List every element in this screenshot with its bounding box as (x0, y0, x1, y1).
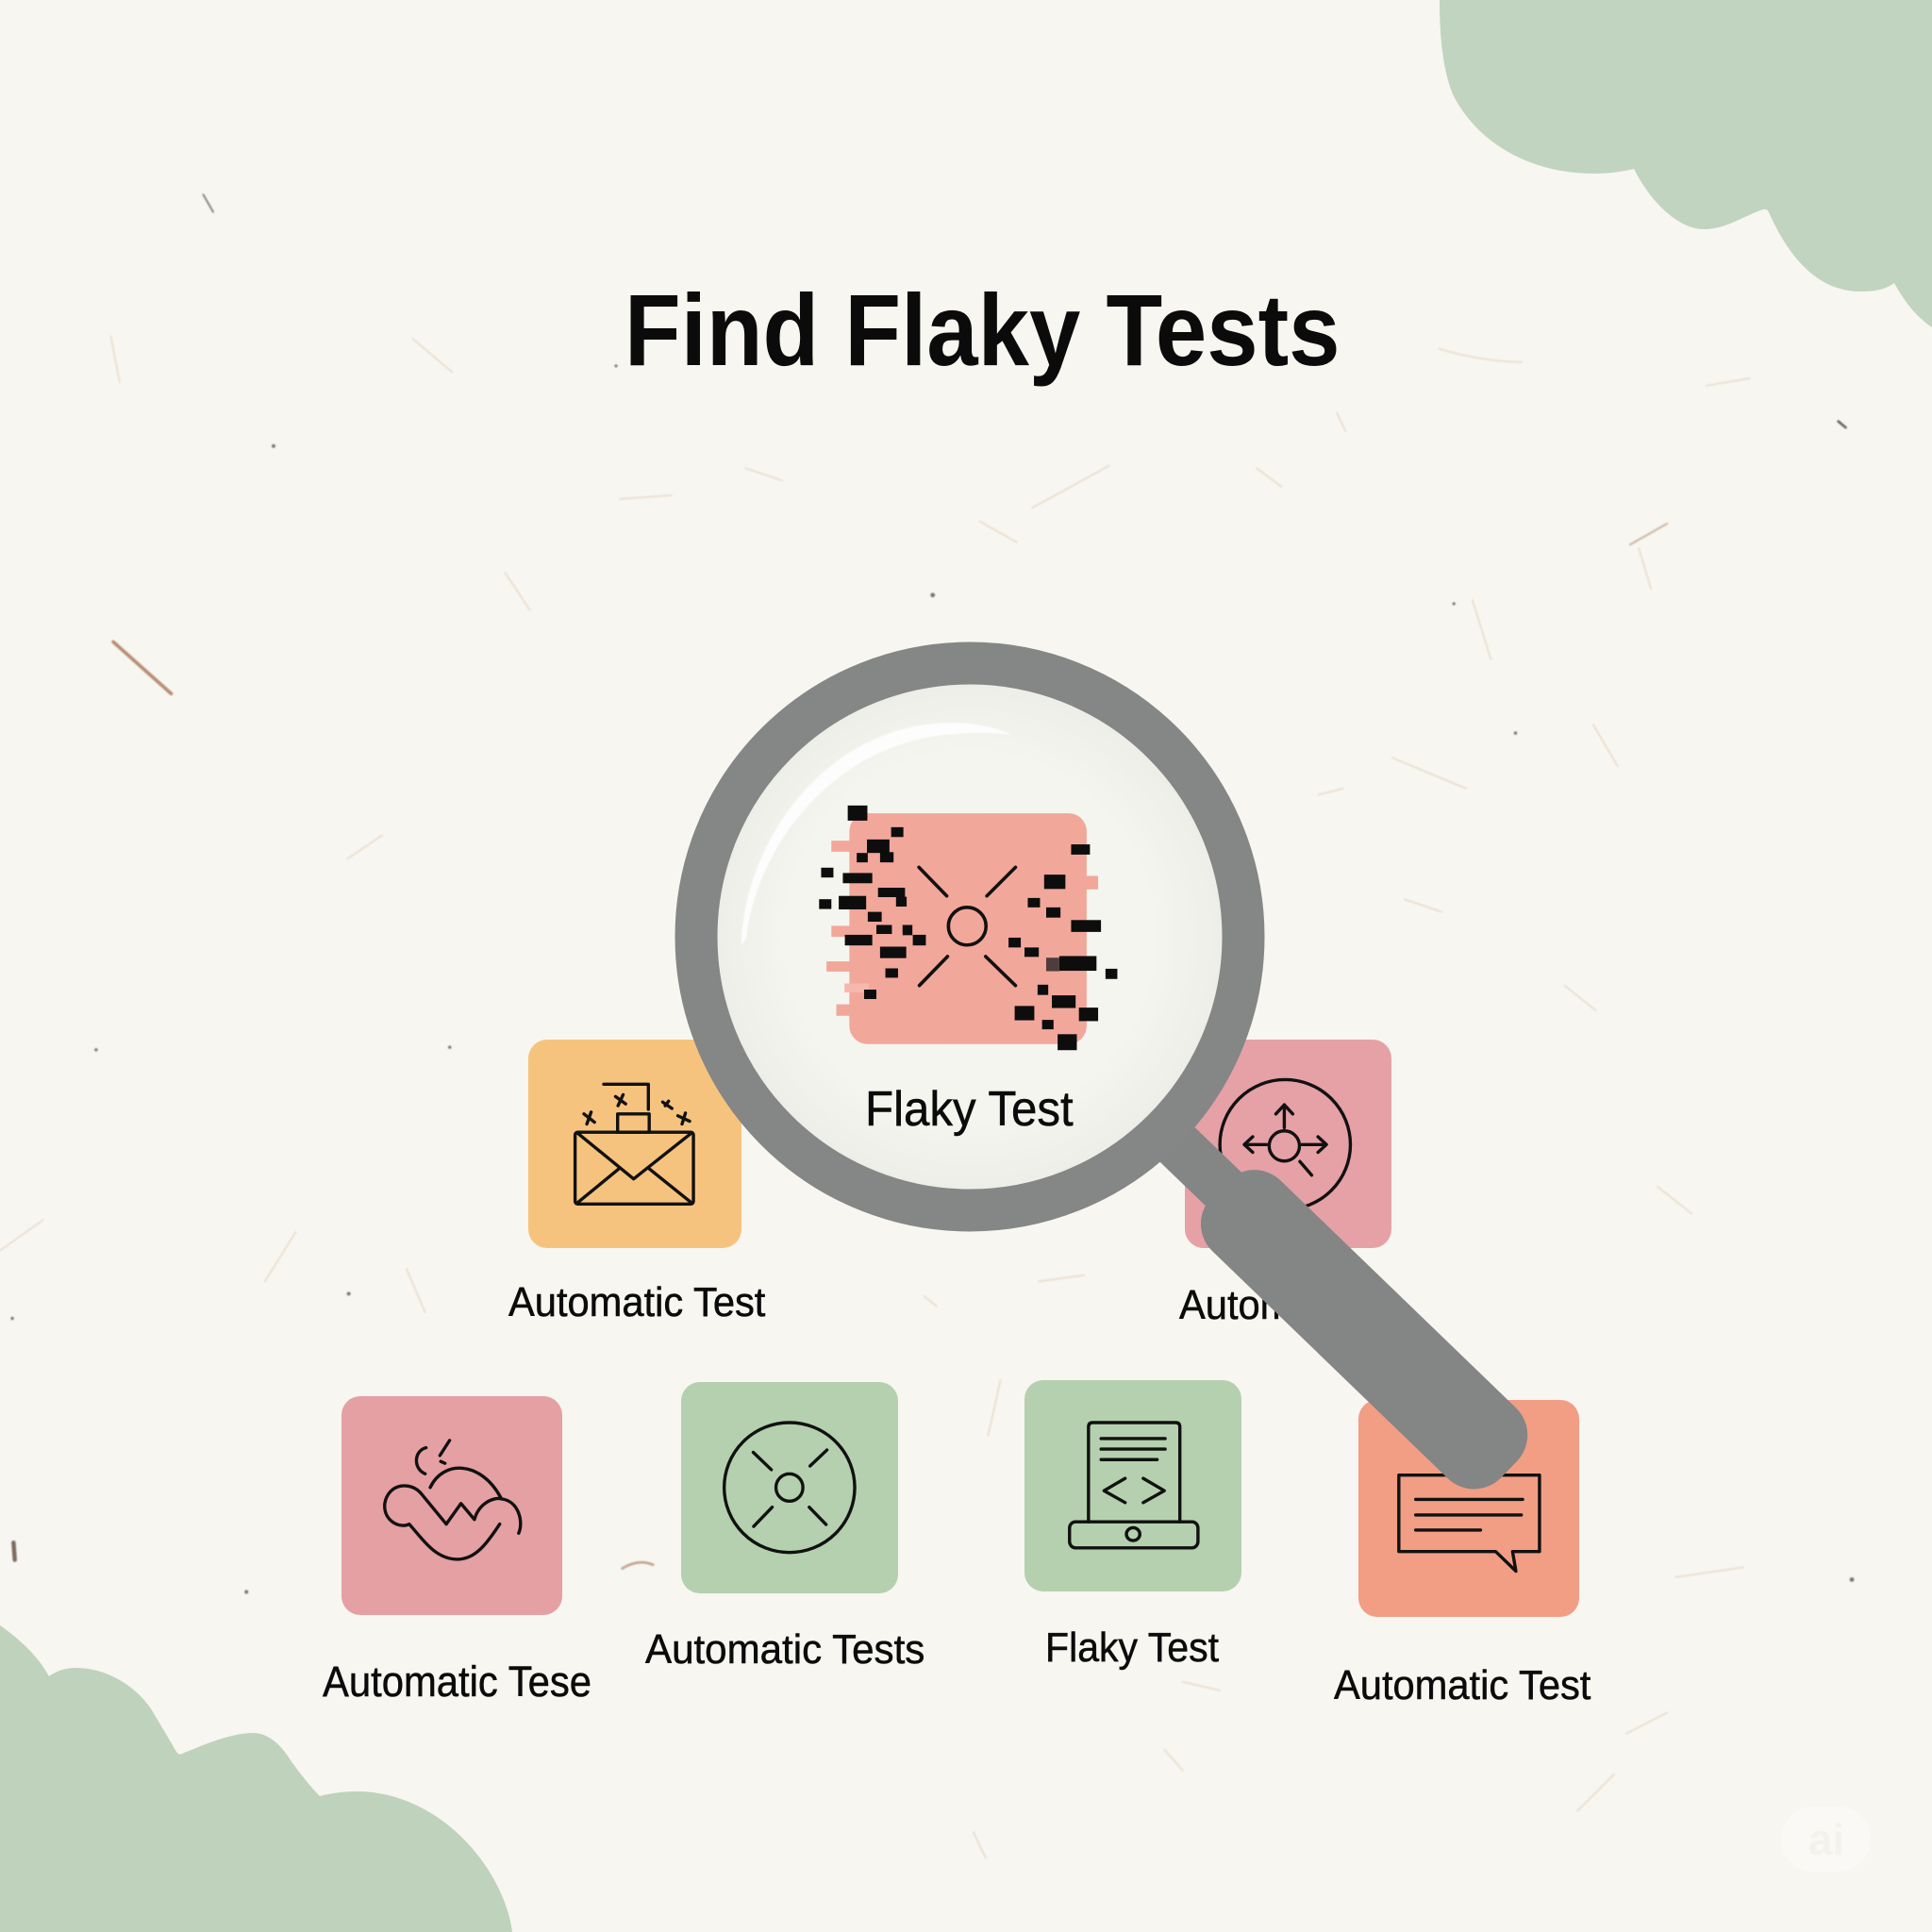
label, mostly hidden behind the handle: Autom (1179, 1282, 1292, 1328)
icon: burst circle (919, 867, 1015, 986)
magnifying glass (696, 663, 1543, 1505)
label: Automatic Test (1334, 1662, 1591, 1708)
lens highlight (741, 723, 1012, 946)
icon: speech bubble (1399, 1475, 1540, 1572)
label: Automatic Test (508, 1279, 765, 1325)
magnifier ring (696, 663, 1243, 1210)
icon: envelope with sparks (575, 1084, 693, 1204)
tile background (341, 1396, 562, 1615)
lens label: Flaky Test (865, 1081, 1074, 1136)
tile background (681, 1382, 898, 1593)
tile: automatic test, speech bubble (1334, 1400, 1591, 1708)
label: Flaky Test (1045, 1624, 1219, 1671)
tile background (1358, 1400, 1579, 1617)
tile: automatic tese, broken link (323, 1396, 591, 1706)
tile background (1185, 1040, 1391, 1248)
icon: circle with arrows (1220, 1079, 1350, 1209)
title: Find Flaky Tests (625, 273, 1340, 387)
flaky tile glitching (819, 806, 1117, 1050)
watermark (1781, 1807, 1871, 1872)
icon: broken link cloud (385, 1441, 521, 1559)
tile background with glitch fragments (826, 813, 1098, 1044)
label: Automatic Tests (645, 1626, 924, 1673)
magnifier handle neck (1160, 1128, 1236, 1201)
icon: code document (1070, 1423, 1198, 1548)
watermark pill (1781, 1807, 1871, 1872)
glitch pixels (819, 806, 1117, 1050)
tile: automatic test, envelope (508, 1040, 765, 1325)
label: Automatic Tese (323, 1659, 591, 1706)
tile: automatic test, network arrows (1179, 1040, 1391, 1328)
corner blob: bottom left (0, 1625, 512, 1932)
lens (715, 682, 1224, 1191)
magnifier handle (1185, 1155, 1543, 1505)
tile: flaky test, code document (1024, 1380, 1241, 1671)
watermark text: ai (1808, 1815, 1844, 1864)
tile background (528, 1040, 741, 1248)
icon: target circle (724, 1423, 855, 1553)
corner blob: top right (1440, 0, 1932, 327)
tile background (1024, 1380, 1241, 1591)
tile: automatic tests, target (645, 1382, 924, 1673)
